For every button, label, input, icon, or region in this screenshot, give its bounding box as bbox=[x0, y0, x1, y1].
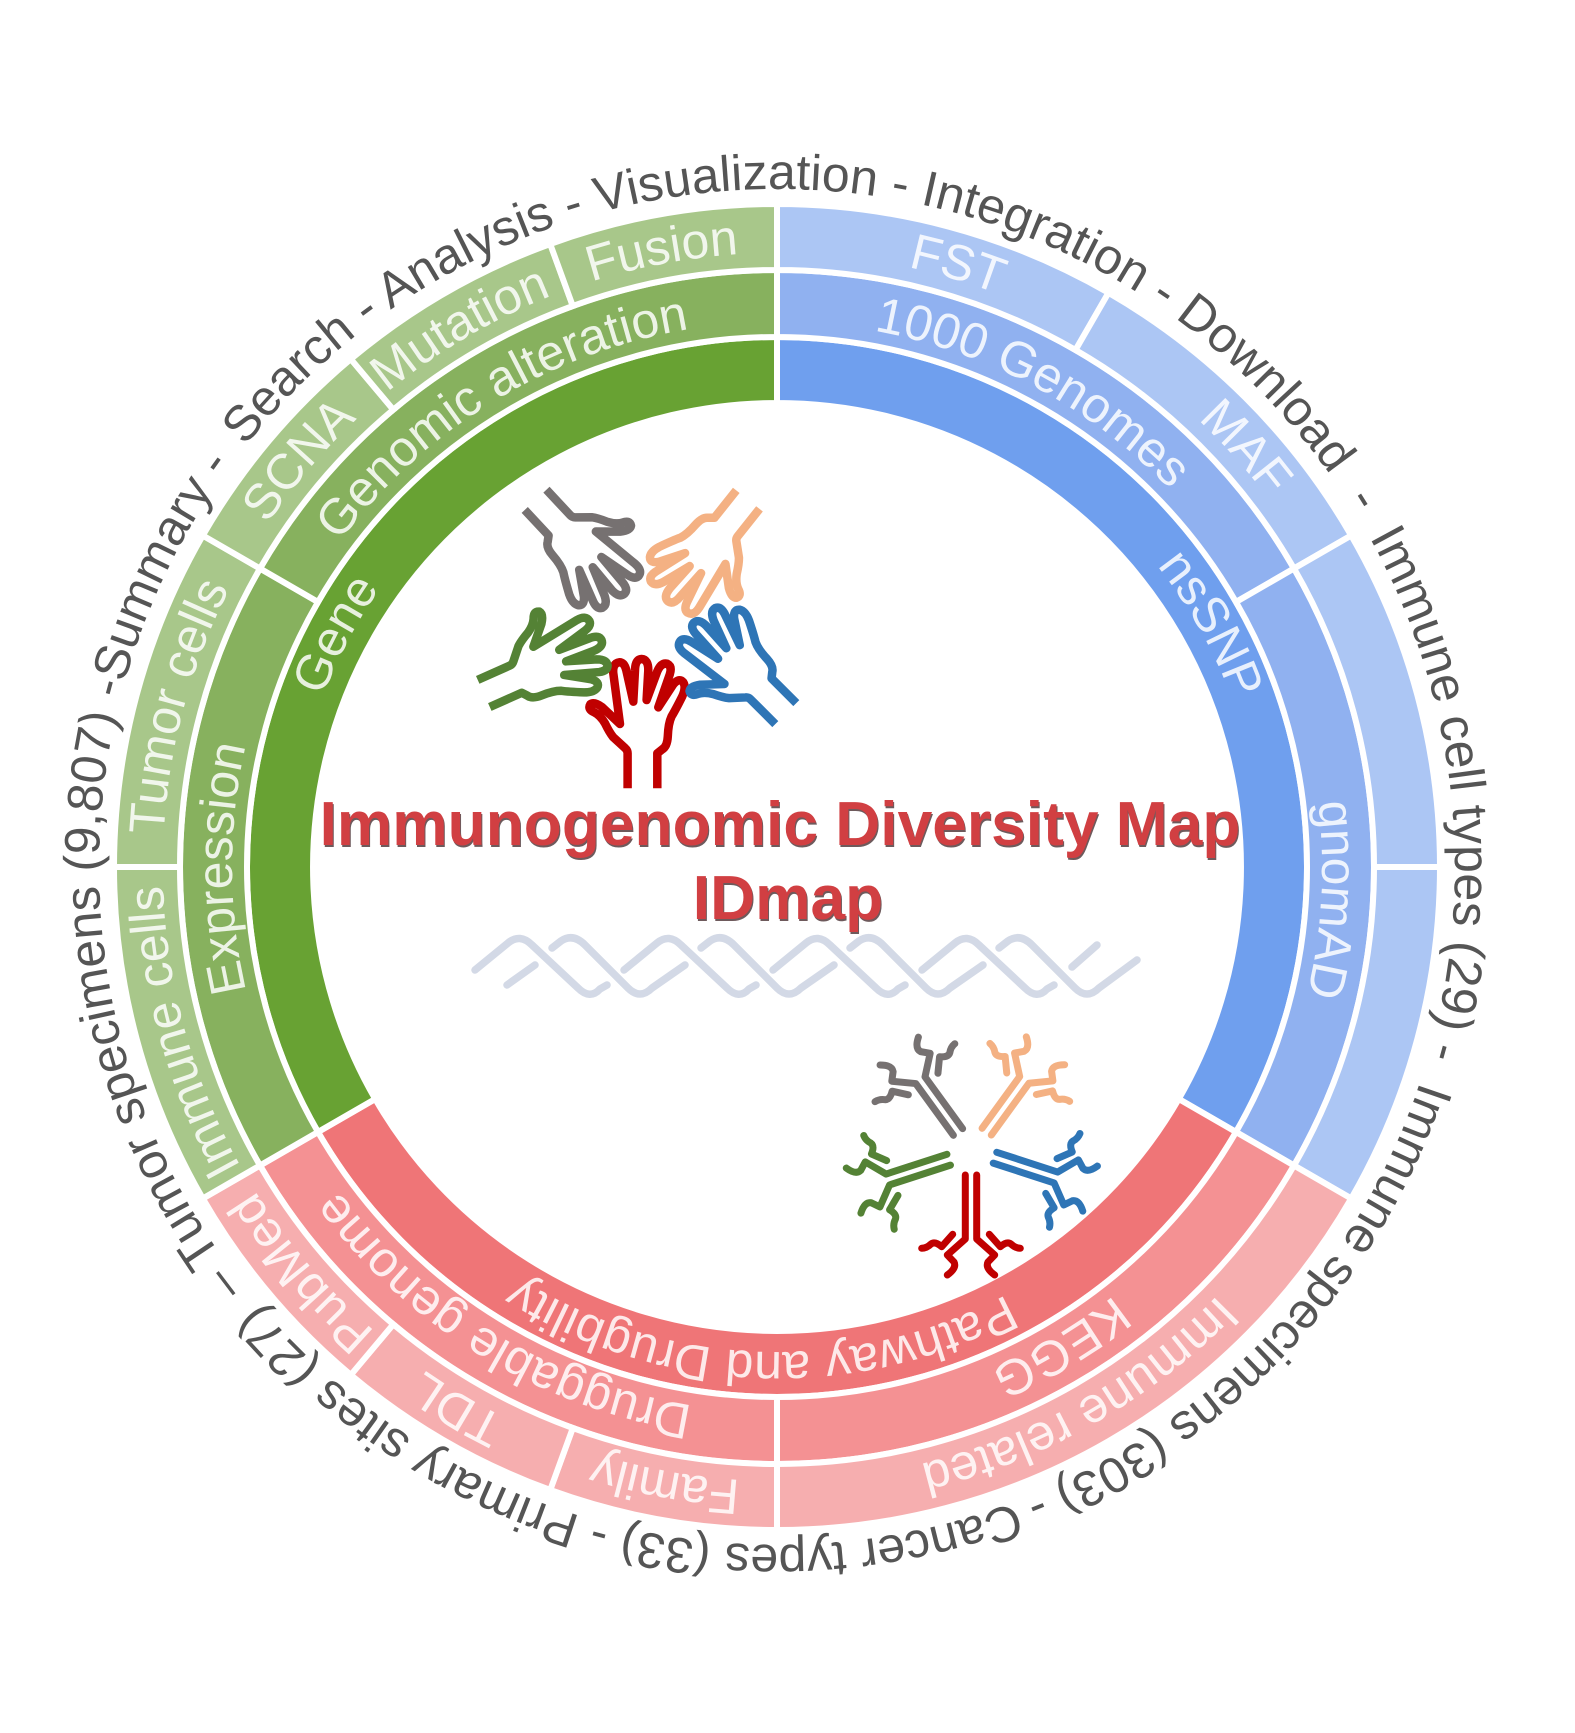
icon: blue hand bbox=[657, 592, 816, 751]
icon: gray hand bbox=[505, 464, 663, 623]
segment: TDL bbox=[355, 1320, 576, 1488]
segment: Family: Family bbox=[588, 1449, 736, 1514]
segment: Mutation: Mutation bbox=[369, 274, 549, 390]
rim text: tumor specimens: Tumor specimens (9,807) bbox=[62, 714, 214, 1274]
segment: MAF bbox=[1072, 294, 1347, 568]
segment: Expression: Expression bbox=[199, 745, 246, 994]
segment: Immune cells: Immune cells bbox=[128, 888, 239, 1179]
rim text: specimens, cancer types and sites: Immune specimens (303) - Cancer types (33) - Primary sites (27) – bbox=[216, 1086, 1452, 1577]
segment: SCNA bbox=[204, 364, 398, 570]
icon: five antibodies bbox=[838, 1022, 1105, 1275]
circular diagram bbox=[62, 154, 1486, 1577]
segment: TDL: TDL bbox=[422, 1371, 494, 1448]
segment: Pathway and Drugbility: Pathway and Drugbility bbox=[504, 1278, 1018, 1386]
segment: Tumor cells: Tumor cells bbox=[129, 582, 226, 832]
title: Immunogenomic Diversity Map bbox=[320, 790, 1240, 859]
segment: FST bbox=[780, 207, 1104, 354]
icon: gray antibody bbox=[859, 1022, 998, 1161]
segment: nsSNP: nsSNP bbox=[1159, 552, 1260, 690]
segment: blank blue upper bbox=[1294, 536, 1440, 867]
segment: nsSNP bbox=[780, 340, 1304, 1128]
segment: FST: FST bbox=[912, 234, 1009, 290]
rim text: functions: -Summary - Search - Analysis - Visualization - Integration - Download - bbox=[94, 154, 1368, 694]
segment: 1000 Genomes bbox=[780, 273, 1290, 606]
segment: Tumor cells bbox=[117, 540, 261, 864]
rim text: immune cell types: Immune cell types (29) - bbox=[1372, 525, 1486, 1059]
segment: Pathway and Drugbility bbox=[322, 1098, 1235, 1394]
segment: Immune related bbox=[780, 1164, 1350, 1527]
icon: red hand bbox=[589, 659, 685, 788]
segment: gnomAD bbox=[1232, 568, 1371, 1162]
icon: blue antibody bbox=[980, 1111, 1105, 1235]
segment: PubMed: PubMed bbox=[226, 1193, 372, 1354]
segment: Expression bbox=[183, 572, 322, 1166]
segment: 1000 Genomes: 1000 Genomes bbox=[878, 300, 1185, 486]
panel: gene and variation inner ring bbox=[250, 340, 1304, 1394]
icon: green antibody bbox=[838, 1113, 964, 1237]
segment: SCNA: SCNA bbox=[244, 404, 357, 518]
segment: KEGG: KEGG bbox=[996, 1298, 1132, 1395]
icon: orange antibody bbox=[947, 1022, 1085, 1161]
segment: Fusion bbox=[548, 207, 774, 310]
segment: Druggable genome: Druggable genome bbox=[322, 1196, 689, 1439]
panel: outer ring bbox=[117, 207, 1437, 1527]
segment: Fusion: Fusion bbox=[586, 224, 736, 280]
panel: middle ring bbox=[183, 273, 1371, 1461]
segment: Immune related: Immune related bbox=[923, 1298, 1239, 1498]
subtitle: IDmap bbox=[693, 864, 883, 933]
segment: Family bbox=[554, 1424, 774, 1527]
segment: Genomic alteration: Genomic alteration bbox=[320, 304, 686, 534]
segment: Druggable genome bbox=[264, 1133, 775, 1461]
segment: Genomic alteration bbox=[261, 273, 774, 606]
segment: blank blue lower bbox=[1294, 867, 1440, 1198]
segment: Gene: Gene bbox=[296, 580, 375, 690]
icon: orange hand bbox=[634, 473, 789, 634]
segment: KEGG bbox=[779, 1131, 1293, 1461]
segment: Gene bbox=[250, 340, 774, 1133]
segment: MAF: MAF bbox=[1201, 398, 1294, 488]
icon: red antibody bbox=[922, 1175, 1020, 1275]
segment: gnomAD: gnomAD bbox=[1309, 802, 1352, 997]
icon: five hands bbox=[462, 464, 816, 788]
icon: green hand bbox=[462, 592, 619, 732]
icon: DNA helix bbox=[475, 938, 1137, 994]
